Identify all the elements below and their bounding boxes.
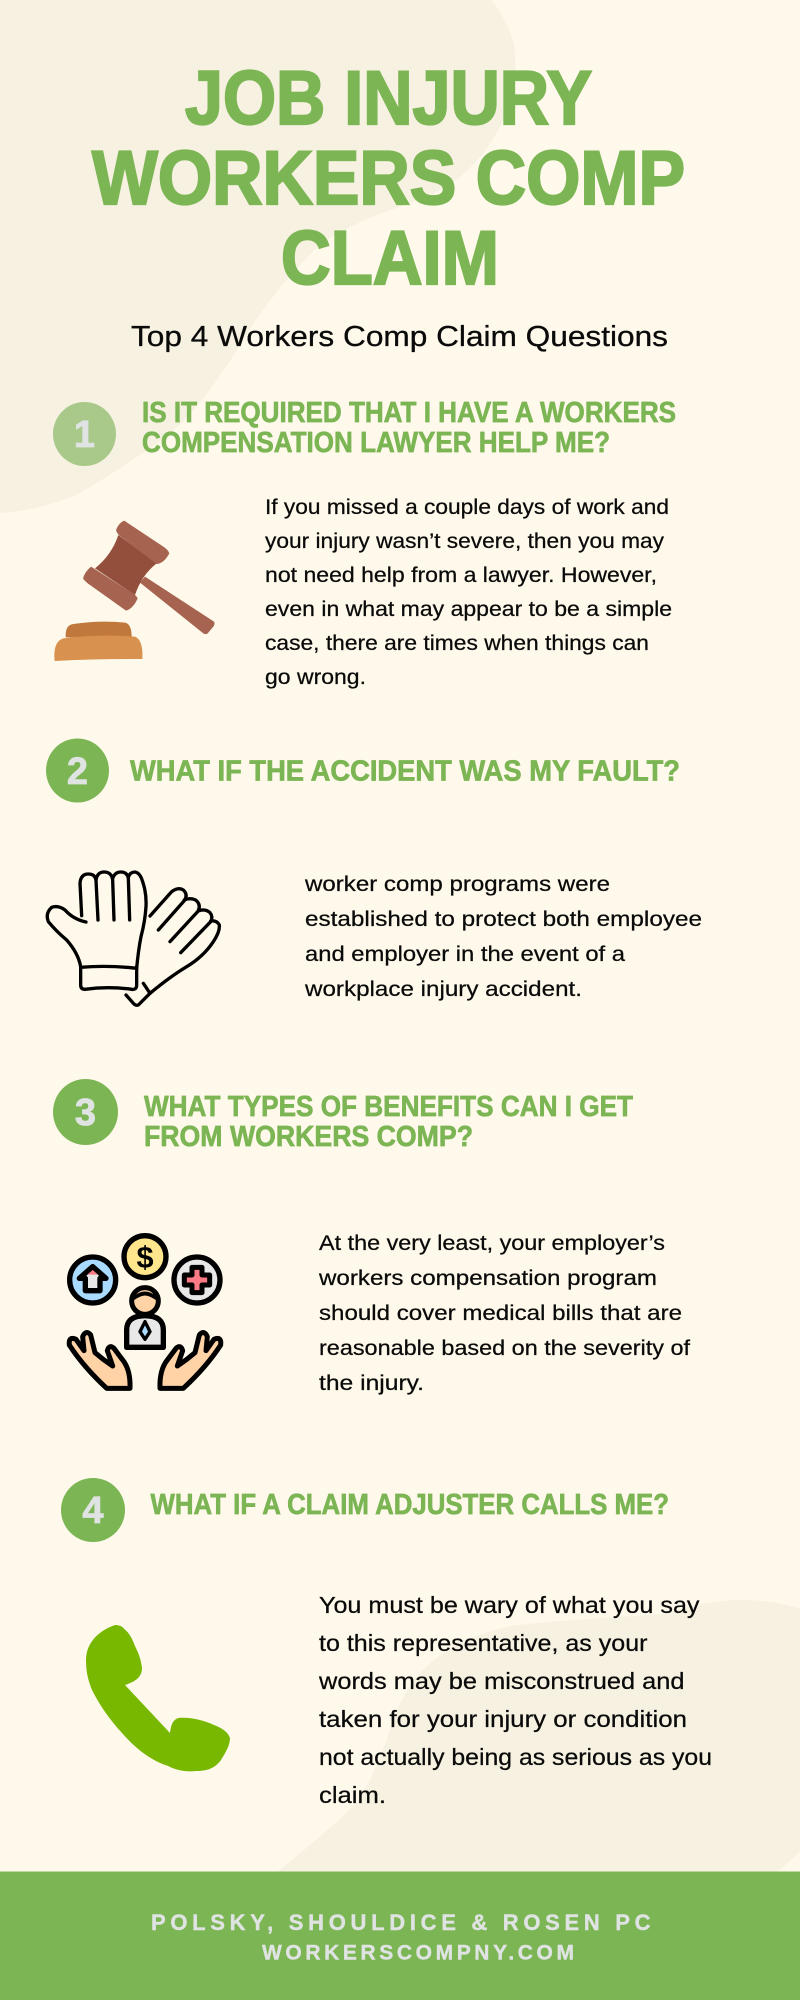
background blob: bottom right: [278, 1600, 800, 1872]
body text 1: go wrong.: [265, 666, 366, 689]
body text 4: words may be misconstrued and: [318, 1668, 684, 1694]
body text 4: You must be wary of what you say: [319, 1592, 700, 1618]
number badge 1: 1: [74, 414, 95, 456]
body text 3: [318, 1232, 690, 1395]
body text 3: reasonable based on the severity of: [319, 1337, 690, 1360]
body text 4: [318, 1592, 712, 1808]
body text 4: not actually being as serious as you: [319, 1744, 712, 1770]
footer band: [0, 1872, 800, 2000]
panel: question 4: [61, 1478, 712, 1808]
body text 3: At the very least, your employer’s: [319, 1232, 665, 1255]
heading 4: WHAT IF A CLAIM ADJUSTER CALLS ME?: [150, 1489, 669, 1521]
body text 2: established to protect both employee: [305, 908, 702, 931]
body text 2: worker comp programs were: [304, 873, 610, 896]
body text 1: not need help from a lawyer. However,: [265, 564, 657, 587]
body text 3: the injury.: [319, 1372, 424, 1395]
icon: gavel: [54, 521, 215, 661]
body text 4: taken for your injury or condition: [319, 1706, 687, 1732]
number badge 2: 2: [67, 751, 88, 793]
background blob: top left: [0, 0, 515, 513]
body text 2: workplace injury accident.: [304, 978, 582, 1001]
number badge 2: [46, 738, 109, 802]
heading 3: WHAT TYPES OF BENEFITS CAN I GET: [144, 1091, 633, 1123]
number badge 3: [53, 1079, 118, 1145]
heading 1: COMPENSATION LAWYER HELP ME?: [142, 427, 610, 459]
body text 3: workers compensation program: [318, 1267, 657, 1290]
body text 2: and employer in the event of a: [305, 943, 625, 966]
number badge 3: 3: [75, 1092, 96, 1134]
footer website: WORKERSCOMPNY.COM: [262, 1942, 574, 1964]
icon: telephone handset: [86, 1625, 230, 1771]
title: [92, 56, 685, 301]
icon part: left hand: [69, 1333, 130, 1388]
body text 1: case, there are times when things can: [265, 632, 649, 655]
body text 2: [304, 873, 702, 1001]
number badge 4: 4: [82, 1490, 104, 1532]
body text 1: even in what may appear to be a simple: [265, 598, 672, 621]
footer firm name: POLSKY, SHOULDICE & ROSEN PC: [151, 1910, 651, 1935]
icon part: dollar coin: [124, 1236, 166, 1278]
heading 2: WHAT IF THE ACCIDENT WAS MY FAULT?: [130, 756, 680, 788]
icon part: medical cross: [174, 1257, 220, 1303]
body text 3: should cover medical bills that are: [319, 1302, 682, 1325]
body text 4: to this representative, as your: [319, 1630, 648, 1656]
number badge 1: [53, 402, 116, 466]
icon: work gloves: [47, 872, 219, 1005]
number badge 4: [61, 1478, 125, 1542]
icon part: right hand: [160, 1333, 221, 1388]
subtitle: Top 4 Workers Comp Claim Questions: [131, 321, 668, 353]
icon part: person: [127, 1288, 163, 1347]
icon: benefits person with hands: [69, 1236, 221, 1388]
body text 1: your injury wasn’t severe, then you may: [265, 530, 665, 553]
heading 1: IS IT REQUIRED THAT I HAVE A WORKERS: [142, 397, 676, 429]
title: WORKERS COMP: [92, 136, 685, 221]
body text 1: [265, 496, 672, 689]
panel: question 3: [53, 1079, 690, 1395]
panel: question 2: [46, 738, 702, 1005]
heading 1: [142, 397, 676, 459]
body text 1: If you missed a couple days of work and: [265, 496, 669, 519]
title: CLAIM: [281, 216, 499, 301]
body text 4: claim.: [319, 1782, 386, 1808]
title: JOB INJURY: [185, 56, 592, 141]
panel: question 1: [53, 397, 676, 689]
heading 3: FROM WORKERS COMP?: [144, 1121, 473, 1153]
icon part: dollar coin: $: [136, 1241, 154, 1275]
icon part: house: [70, 1257, 116, 1303]
heading 3: [144, 1091, 633, 1153]
